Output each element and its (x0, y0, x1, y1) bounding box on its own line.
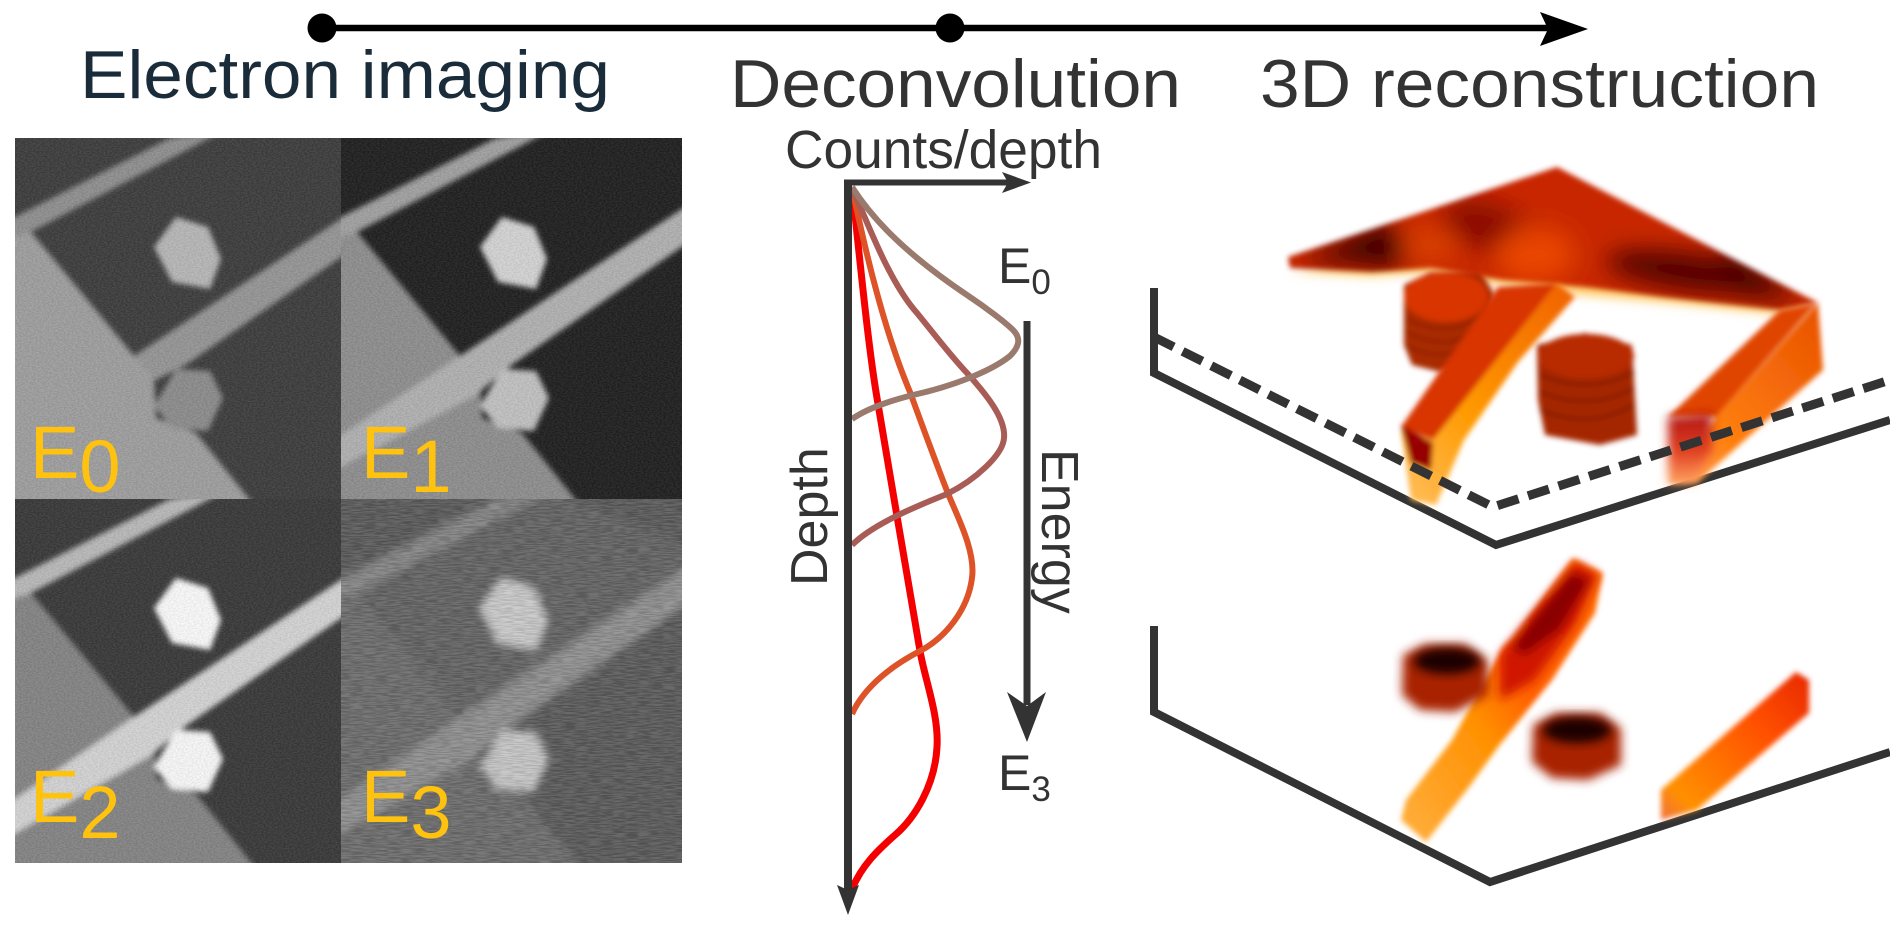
label: E3: E (998, 745, 1031, 801)
long strip (1401, 283, 1575, 505)
depth curve E1 (852, 187, 1004, 545)
depth curve E0 (852, 187, 1018, 419)
cylinder behind (1404, 270, 1495, 372)
label: E1: 1 (410, 425, 452, 508)
depth curve E2 (852, 187, 973, 714)
right strip (1668, 303, 1823, 483)
label: E0: E (30, 411, 79, 494)
plate (1288, 167, 1818, 310)
depth curve E3 (852, 187, 937, 889)
volume: top plate and strips (1288, 167, 1823, 505)
image E2 (15, 499, 341, 863)
label: E2: 2 (79, 771, 121, 854)
heading: Electron imaging: Electron imaging (80, 37, 610, 113)
dashed plane (1154, 337, 1890, 507)
volume: cylinder left (1402, 644, 1488, 712)
axis label: Counts/depth: Counts/depth (785, 120, 1102, 180)
panel: 3D reconstruction top (1154, 167, 1890, 545)
label: E3: E (361, 755, 410, 838)
volume: long strip (1401, 558, 1603, 842)
panel: electron images (5, 130, 706, 871)
label: E0: 0 (79, 425, 121, 508)
image E3 (341, 499, 682, 863)
energy arrow (1007, 321, 1046, 742)
cylinder front (1537, 333, 1637, 445)
volume: right strip (1661, 672, 1809, 820)
image E0 (15, 138, 341, 499)
frame axes (1154, 288, 1890, 545)
panel: 3D reconstruction bottom (1154, 558, 1890, 882)
label: E3: 3 (1031, 770, 1051, 809)
timeline arrow (308, 12, 1588, 46)
label: E0: E (998, 238, 1031, 294)
panel: deconvolution chart (781, 120, 1102, 915)
label: E1: E (361, 411, 410, 494)
image E1 (341, 138, 682, 499)
right strip end (1668, 413, 1712, 483)
label: E2: E (30, 755, 79, 838)
axis label: Depth: Depth (781, 447, 839, 586)
volume: cylinder right (1532, 713, 1621, 780)
depth axis arrow (837, 180, 859, 915)
frame axes (1154, 626, 1890, 882)
horizontal axis arrow (844, 172, 1031, 193)
heading: Deconvolution: Deconvolution (730, 46, 1181, 122)
label: E0: 0 (1031, 263, 1051, 302)
heading: 3D reconstruction: 3D reconstruction (1260, 46, 1819, 122)
volume: long strip red part (1500, 562, 1598, 700)
axis label: Energy: Energy (1030, 449, 1088, 614)
label: E3: 3 (410, 771, 452, 854)
